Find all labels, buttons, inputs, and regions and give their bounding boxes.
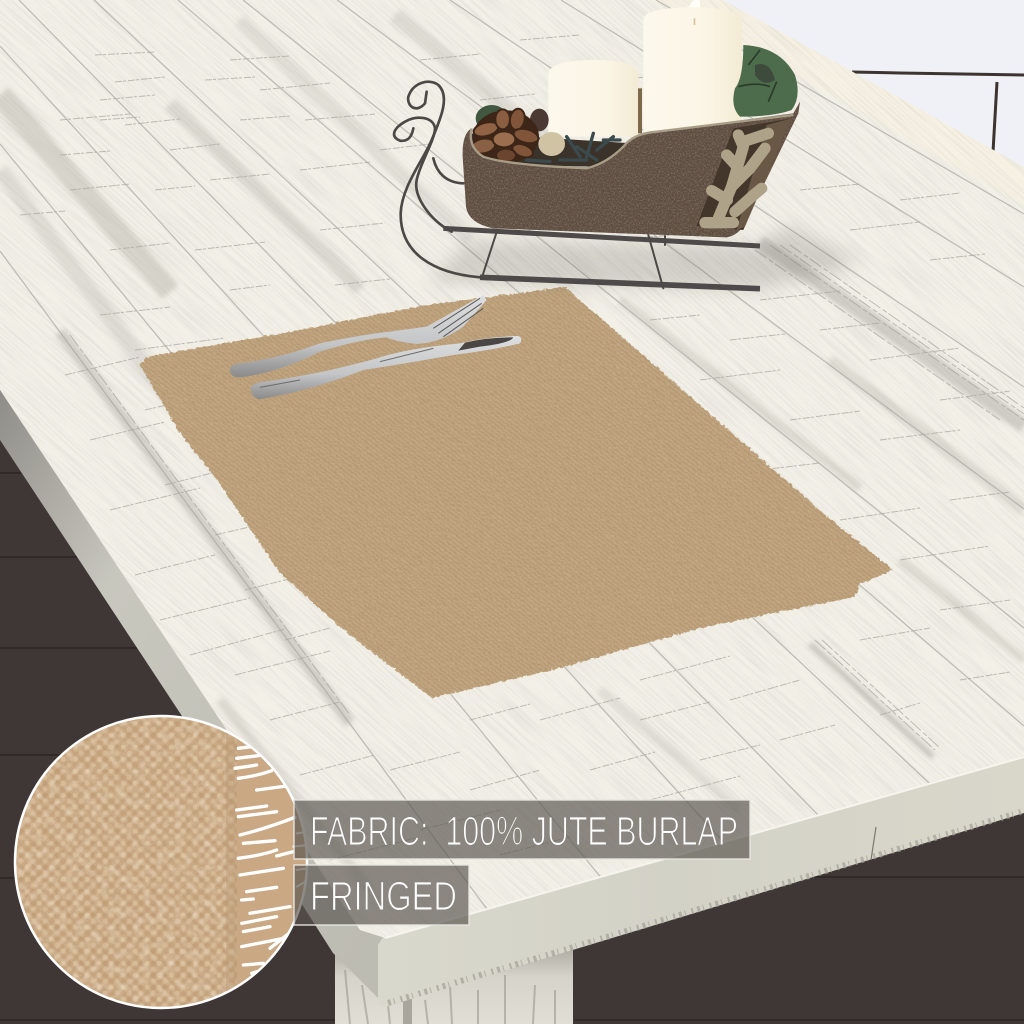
blue sprigs (527, 133, 620, 162)
fine streaks in the worn bands (70, 245, 1024, 750)
table apron (0, 390, 386, 1000)
sleigh inner shadow (470, 133, 633, 167)
sleigh body (463, 102, 800, 237)
sleigh metal runners (394, 82, 760, 289)
table leg (335, 945, 573, 1024)
sleigh centerpiece (394, 0, 800, 289)
wall (700, 0, 1024, 200)
sleigh shadow (430, 225, 860, 290)
fabric close-up circle (15, 715, 312, 1010)
label: fringed: FRINGED (310, 873, 457, 919)
label: fabric (294, 800, 750, 859)
fork (230, 295, 487, 377)
knife (251, 336, 521, 399)
green pod (733, 45, 798, 117)
openwork panel (697, 118, 792, 230)
small dark cone (530, 109, 549, 131)
table front highlight (385, 757, 1024, 938)
label: fabric: FABRIC: 100% JUTE BURLAP (310, 808, 738, 854)
back green ball (476, 105, 508, 132)
small candle (548, 60, 642, 137)
pine cone (470, 108, 540, 162)
fringe streaks (235, 747, 308, 973)
label: fringed (294, 865, 469, 925)
large candle (643, 0, 742, 133)
burlap placemat (140, 287, 893, 698)
cross hatch scratches (20, 35, 1010, 860)
table front face (378, 752, 1024, 1007)
dried flower (538, 132, 565, 156)
